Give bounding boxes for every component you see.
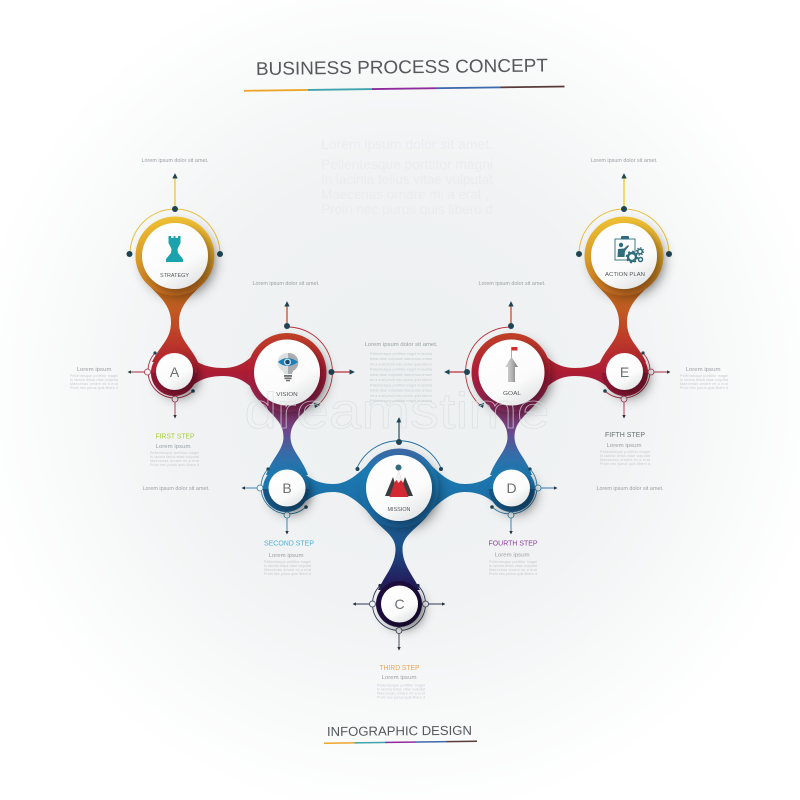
caption: above vision: Lorem ipsum dolor sit amet. xyxy=(252,281,320,287)
connector: mission to C xyxy=(370,515,428,590)
text block: right of E: Proin nec purus quis libero d xyxy=(680,386,728,390)
label: A: A xyxy=(170,364,180,380)
node: A xyxy=(130,350,197,416)
step text: fourth: Maecenas ornare mi a erat xyxy=(489,568,537,572)
step text: fifth: Lorem ipsum xyxy=(606,443,642,449)
node: E xyxy=(602,350,668,416)
step text: first: Proin nec purus quis libero d xyxy=(150,463,199,467)
node: strategy xyxy=(126,177,223,296)
text block: center: Lorem ipsum dolor sit amet. xyxy=(364,342,438,348)
label: B: B xyxy=(282,480,292,496)
step text: fourth: FOURTH STEP xyxy=(488,540,538,548)
text block: center: mi a erat proin nec purus quis libero xyxy=(370,362,432,366)
step text: second: In lacinia tellus vitae vulputat xyxy=(264,564,311,568)
text block: center: tellus vitae vulputate maecenas ornare xyxy=(370,373,432,377)
text block: center: Pellentesque porttitor magni in lacinia xyxy=(370,384,432,388)
step text: first: Maecenas ornare mi a erat xyxy=(150,459,199,463)
icon: clipboard and gears xyxy=(615,236,644,263)
connector: goal to D xyxy=(482,398,540,475)
label: C: C xyxy=(394,596,405,612)
label: strategy: STRATEGY xyxy=(160,273,189,279)
text block: right of E: In lacinia tellus vitae vulputat xyxy=(680,378,728,382)
icon: arrow with flag xyxy=(505,347,518,382)
caption: above action plan: Lorem ipsum dolor sit amet. xyxy=(590,158,658,164)
label: action plan: ACTION PLAN xyxy=(605,272,645,278)
label: vision: VISION xyxy=(276,392,298,398)
connector: A to vision xyxy=(185,345,262,399)
text block: left of A: Pellentesque porttitor magni xyxy=(70,374,118,378)
step text: fourth xyxy=(488,540,538,576)
caption: above strategy: Lorem ipsum dolor sit amet. xyxy=(142,158,209,164)
text block: left of A: Lorem ipsum xyxy=(76,367,112,373)
text block: right of E: Pellentesque porttitor magni xyxy=(680,374,728,378)
step text: third: In lacinia tellus vitae vulputat xyxy=(377,688,425,692)
step text: second: Pellentesque porttitor magni xyxy=(264,560,311,564)
connector: D to mission xyxy=(426,460,500,516)
step text: fourth: Pellentesque porttitor magni xyxy=(489,560,537,564)
text block: center xyxy=(364,342,438,403)
label: E: E xyxy=(620,364,629,380)
step text: first: Lorem ipsum xyxy=(156,444,191,450)
connector: E to goal xyxy=(536,345,613,399)
caption: above goal: Lorem ipsum dolor sit amet. xyxy=(478,281,546,287)
step text: fourth: Lorem ipsum xyxy=(494,552,530,558)
text block: center: mi a erat proin nec purus quis libero xyxy=(370,394,432,398)
label: goal: GOAL xyxy=(503,391,522,397)
watermark: dreamstime xyxy=(244,383,550,439)
connector: B to mission xyxy=(298,460,372,516)
step text: fourth: Proin nec purus quis libero d xyxy=(489,572,537,576)
text block: right of E xyxy=(680,367,728,390)
step text: third: Pellentesque porttitor magni xyxy=(377,684,425,688)
intro text block: In lacinia tellus vitae vulputat xyxy=(321,171,493,187)
intro text block: Lorem ipsum dolor sit amet. xyxy=(321,136,493,152)
step text: first: FIRST STEP xyxy=(156,434,195,440)
icon: chess rook xyxy=(166,236,183,262)
connector: vision to B xyxy=(258,398,316,475)
node: C xyxy=(355,581,443,648)
text block: left of A xyxy=(70,367,118,390)
step text: third: Maecenas ornare mi a erat xyxy=(377,692,425,696)
text block: center: Pellentesque porttitor magni in lacinia xyxy=(370,352,432,356)
text block: center: Pellentesque porttitor magni in lacinia xyxy=(370,368,432,372)
intro text block: Maecenas ornare mi a erat , xyxy=(321,186,489,202)
step text: second: Lorem ipsum xyxy=(268,553,304,559)
connector: action plan to E xyxy=(594,282,652,362)
caption: right of D: Lorem ipsum dolor sit amet. xyxy=(596,486,664,492)
text block: left of A: Maecenas ornare mi a erat xyxy=(70,382,118,386)
text block: left of A: In lacinia tellus vitae vulputat xyxy=(70,378,118,382)
step text: fifth xyxy=(600,432,650,466)
connector: strategy to A xyxy=(146,282,204,362)
text block: right of E: Lorem ipsum xyxy=(686,367,721,373)
text block: left of A: Proin nec purus quis libero d xyxy=(70,386,118,390)
node: action plan xyxy=(576,177,672,296)
text block: center: mi a erat proin nec purus quis libero xyxy=(370,378,432,382)
icon: light bulb with eye xyxy=(278,353,298,381)
step text: first: In lacinia tellus vitae vulputat xyxy=(150,455,199,459)
label: mission: MISSION xyxy=(388,507,410,513)
step text: third: THIRD STEP xyxy=(380,665,420,672)
label: D: D xyxy=(506,480,517,496)
title: BUSINESS PROCESS CONCEPT xyxy=(256,54,548,79)
step text: fourth: In lacinia tellus vitae vulputat xyxy=(489,564,537,568)
step text: fifth: Pellentesque porttitor magni xyxy=(600,450,650,454)
step text: first: Pellentesque porttitor magni xyxy=(150,451,199,455)
node: mission xyxy=(356,421,443,528)
intro text block: Pellentesque porttitor magni xyxy=(321,156,493,172)
step text: fifth: Proin nec purus quis libero d xyxy=(600,462,650,466)
node: B xyxy=(244,466,309,532)
step text: fifth: Maecenas ornare mi a erat xyxy=(600,458,650,462)
title xyxy=(244,54,564,91)
text block: right of E: Maecenas ornare mi a erat xyxy=(680,382,728,386)
step text: third: Proin nec purus quis libero d xyxy=(377,696,425,700)
node: vision xyxy=(248,305,351,412)
step text: third xyxy=(377,665,425,700)
step text: second: SECOND STEP xyxy=(264,540,314,548)
step text: fifth: FIFTH STEP xyxy=(605,432,645,439)
step text: second: Proin nec purus quis libero d xyxy=(264,572,311,576)
intro text block xyxy=(322,139,492,162)
caption: left of B: Lorem ipsum dolor sit amet. xyxy=(142,486,210,492)
step text: first xyxy=(150,434,199,467)
step text: third: Lorem ipsum xyxy=(382,675,417,681)
step text: fifth: In lacinia tellus vitae vulputat xyxy=(600,454,650,458)
text block: center: tellus vitae vulputate maecenas ornare xyxy=(370,357,432,361)
step text: second: Maecenas ornare mi a erat xyxy=(264,568,311,572)
step text: second xyxy=(264,540,314,576)
intro text block: Proin nec purus quis libero d xyxy=(321,201,493,217)
text block: center: tellus vitae vulputate maecenas ornare xyxy=(370,388,432,392)
icon: mountains xyxy=(385,464,413,497)
footer heading: INFOGRAPHIC DESIGN xyxy=(327,723,472,739)
text block: center: Pellentesque porttitor magni in lacinia xyxy=(370,399,432,403)
node: goal xyxy=(448,305,550,412)
connector ribbon xyxy=(146,282,652,590)
node: D xyxy=(489,466,555,532)
